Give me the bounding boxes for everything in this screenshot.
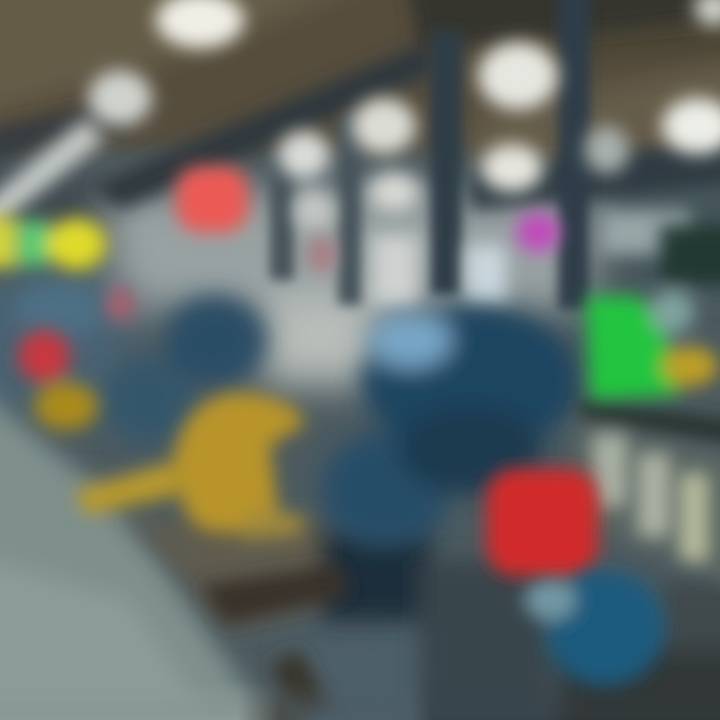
icon: red marker top xyxy=(176,166,248,232)
ceiling lights xyxy=(0,0,720,235)
bottom edge colour strip xyxy=(0,688,720,720)
icon: pink marker xyxy=(516,212,560,252)
grey shelf panels xyxy=(575,400,720,600)
floor xyxy=(0,365,450,720)
ceiling xyxy=(0,0,720,180)
mid wall haze xyxy=(0,170,720,410)
dark base shadow xyxy=(200,565,350,720)
blue machines xyxy=(14,280,578,548)
white pillars in the middle distance xyxy=(372,210,690,305)
icon: yellow green band left xyxy=(0,216,106,270)
blue tank bottom right xyxy=(524,570,665,686)
yellow machine xyxy=(75,392,305,540)
machine bases xyxy=(130,520,720,720)
support columns xyxy=(270,0,590,310)
icon: green machine right xyxy=(586,225,720,400)
small left machines xyxy=(18,236,336,430)
ceiling beams xyxy=(0,0,720,210)
red machine xyxy=(486,468,598,576)
